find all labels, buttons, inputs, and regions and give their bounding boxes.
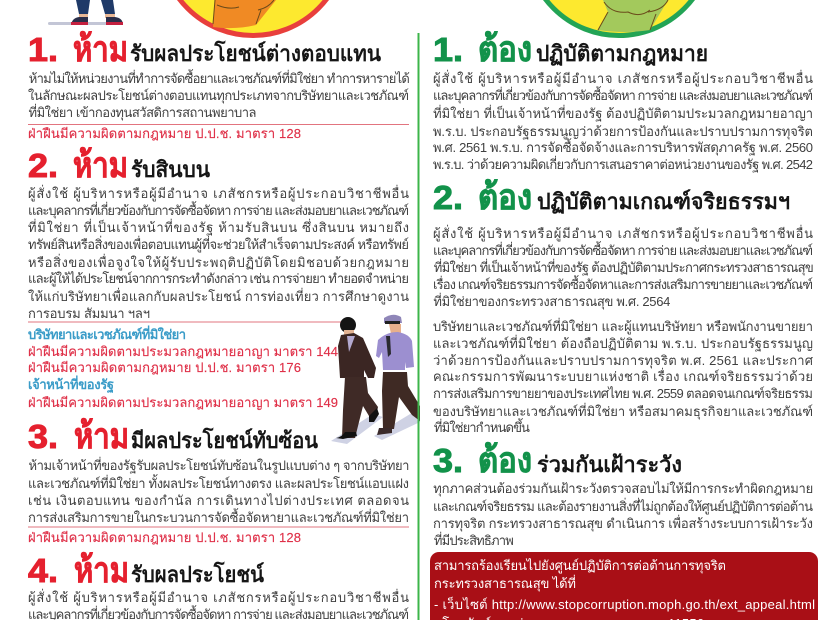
icon: red circle fist	[160, 0, 346, 36]
heading: obligation 1: ต้อง	[478, 30, 532, 69]
heading: prohibition 2: 2.	[28, 147, 58, 184]
text: prohibition 3 body: เช่น เงินตอบแทน ของกำนัล การเดินทางไปต่างประเทศ ตลอดจน	[28, 493, 409, 508]
text: prohibition 1 body	[28, 69, 410, 121]
text: prohibition 3 body: และเวชภัณฑ์ที่มิใช่ยา ทั้งผลประโยชน์ทางตรง และผลประโยชน์แอบแฝง	[28, 474, 409, 491]
heading: obligation 3	[433, 441, 682, 480]
divider	[418, 33, 420, 620]
text: prohibition 3 body: ห้ามเจ้าหน้าที่ของรัฐรับผลประโยชน์ทับซ้อนในรูปแบบต่าง ๆ จากบริษัทยา	[28, 457, 409, 474]
text: prohibition 1 body: ห้ามไม่ให้หน่วยงานที่ทำการจัดซื้อยาและเวชภัณฑ์ที่มิใช่ยา ทำการหารายได้	[29, 69, 410, 86]
text: obligation 2 second paragraph: คณะกรรมการพัฒนาระบบยาแห่งชาติ เรื่อง เกณฑ์จริยธรรมว่าด้วย	[433, 368, 813, 384]
text: prohibition 2 body: หรือสิ่งของเพื่อจูงใจให้ผู้รับประพฤติปฏิบัติโดยมิชอบด้วยกฎหมาย	[28, 254, 409, 271]
heading: prohibition 4	[28, 551, 264, 590]
text: prohibition 1 body: ในลักษณะผลประโยชน์ต่างตอบแทนทุกประเภทจากบริษัทยาและเวชภัณฑ์	[28, 88, 409, 104]
text: obligation 3 body: ทุกภาคส่วนต้องร่วมกันเฝ้าระวังตรวจสอบไม่ให้มีการกระทำผิดกฎหมาย	[433, 481, 813, 497]
text: prohibition 2 body: การอบรม สัมมนา ฯลฯ	[28, 306, 150, 321]
text: obligation 3 body: ที่มีประสิทธิภาพ	[434, 532, 514, 548]
text: prohibition 3 penalty: ฝ่าฝืนมีความผิดตามกฎหมาย ป.ป.ช. มาตรา 128	[28, 530, 301, 545]
text: obligation 2 second paragraph: ว่าด้วยการป้องกันและปราบปรามการทุจริต พ.ศ. 2561 และประกาศ	[433, 353, 814, 369]
suspect	[340, 317, 356, 333]
text: obligation 2 body: เรื่อง เกณฑ์จริยธรรมการจัดซื้อจัดหาและการส่งเสริมการขายยาและเวชภัณฑ์	[433, 275, 813, 292]
panel: obligations	[430, 30, 818, 620]
text: obligation 3 body: และเกณฑ์จริยธรรม และต้องรายงานสิ่งที่ไม่ถูกต้องให้ศูนย์ปฏิบัติการต่อต้าน	[433, 498, 813, 515]
text: prohibition 2 body: และผู้ให้ได้ประโยชน์จากการกระทำดังกล่าว เช่น การจ่ายยา ทำยอดจำหน่าย	[28, 271, 409, 287]
heading: prohibition 3: ห้าม	[74, 417, 129, 456]
text: prohibition 2 body	[28, 185, 409, 321]
heading: prohibition 1: ห้าม	[73, 30, 128, 69]
text: obligation 1 body: ผู้สั่งใช้ ผู้บริหารหรือผู้มีอำนาจ เภสัชกรหรือผู้ประกอบวิชาชีพอื่น	[433, 70, 813, 87]
icon: officer escorting suspect	[331, 315, 420, 444]
icon: green circle fist	[526, 0, 712, 36]
heading: prohibition 2: รับสินบน	[131, 157, 210, 182]
officer	[384, 315, 402, 323]
text: prohibition 2 body: ที่มิใช่ยา ที่เป็นเจ้าหน้าที่ของรัฐ ห้ามรับสินบน ซึ่งสินบน หมายถึง	[28, 218, 409, 236]
text: prohibition 2 body: และบุคลากรที่เกี่ยวข้องกับการจัดซื้อจัดหา การจ่าย และส่งมอบยาและเวชภัณฑ์	[28, 201, 409, 219]
heading: obligation 1: ปฏิบัติตามกฎหมาย	[536, 41, 708, 66]
text: prohibition 2 body: ทรัพย์สินหรือสิ่งของเพื่อตอบแทนผู้ที่จะช่วยให้สำเร็จตามประสงค์ หรือทรัพย์	[28, 235, 409, 253]
heading: prohibition 2: ห้าม	[73, 146, 128, 185]
text: obligation 3 body	[433, 481, 813, 548]
callout: complaint channels: - เว็บไซต์ http://www.stopcorruption.moph.go.th/ext_appeal.html	[434, 595, 815, 612]
text: prohibition 2 penalties: บริษัทยาและเวชภัณฑ์ที่มิใช่ยา	[28, 325, 186, 342]
heading: prohibition 3: 3.	[28, 418, 58, 455]
heading: prohibition 1: 1.	[28, 31, 58, 68]
text: prohibition 2 penalties: ฝ่าฝืนมีความผิดตามกฎหมาย ป.ป.ช. มาตรา 176	[28, 360, 301, 375]
heading: obligation 1: 1.	[433, 31, 463, 68]
heading: obligation 3: ร่วมกันเฝ้าระวัง	[537, 452, 682, 477]
heading: prohibition 3	[28, 417, 318, 456]
text: prohibition 2 penalties: เจ้าหน้าที่ของรัฐ	[28, 375, 114, 394]
heading: obligation 1	[433, 30, 708, 69]
text: obligation 2 second paragraph: และเวชภัณฑ์ที่มิใช่ยา ต้องถือปฏิบัติตาม พ.ร.บ. ประกอบรัฐธรรมนูญ	[433, 335, 813, 352]
text: prohibition 1 penalty: ฝ่าฝืนมีความผิดตามกฎหมาย ป.ป.ช. มาตรา 128	[28, 126, 301, 141]
text: prohibition 3 body	[28, 457, 409, 525]
heading: obligation 2: ต้อง	[478, 178, 532, 217]
text: prohibition 2 penalties: ฝ่าฝืนมีความผิดตามประมวลกฎหมายอาญา มาตรา 144	[28, 344, 338, 359]
text: obligation 2 body: ผู้สั่งใช้ ผู้บริหารหรือผู้มีอำนาจ เภสัชกรหรือผู้ประกอบวิชาชีพอื่น	[433, 225, 813, 242]
text: obligation 1 body: ที่มิใช่ยา ที่เป็นเจ้าหน้าที่ของรัฐ ต้องปฏิบัติตามประมวลกฎหมายอาญา	[433, 104, 813, 122]
heading: prohibition 1	[28, 30, 381, 69]
heading: prohibition 1: รับผลประโยชน์ต่างตอบแทน	[130, 40, 381, 66]
callout: complaint channels: สามารถร้องเรียนไปยังศูนย์ปฏิบัติการต่อต้านการทุจริต	[434, 558, 726, 574]
heading: prohibition 2	[28, 146, 210, 185]
text: obligation 1 body: พ.ร.บ. ประกอบรัฐธรรมนูญว่าด้วยการป้องกันและปราบปรามการทุจริต	[433, 124, 813, 140]
icon: person legs	[48, 0, 123, 25]
text: prohibition 2 penalties	[28, 325, 338, 410]
text: prohibition 2 body: ให้แก่บริษัทยาเพื่อแลกกับผลประโยชน์ การท่องเที่ยว การศึกษาดูงาน	[28, 288, 409, 305]
callout: complaint channels	[430, 552, 818, 620]
text: obligation 2 body: ที่มิใช่ยาของกระทรวงสาธารณสุข พ.ศ. 2564	[433, 293, 670, 310]
text: obligation 2 second paragraph: บริษัทยาและเวชภัณฑ์ที่มิใช่ยา และผู้แทนบริษัทยา หรือพนักงานขายยา	[433, 318, 813, 335]
text: obligation 3 body: การทุจริต กระทรวงสาธารณสุข ดำเนินการ เพื่อสร้างระบบการเฝ้าระวัง	[433, 515, 813, 532]
text: obligation 2 body: ที่มิใช่ยา ที่เป็นเจ้าหน้าที่ของรัฐ ต้องปฏิบัติตามประกาศกระทรวงสาธารณสุข	[434, 258, 814, 276]
heading: prohibition 4: ห้าม	[74, 551, 129, 590]
text: obligation 2 second paragraph: ที่มิใช่ยากำหนดขึ้น	[434, 418, 530, 435]
text: prohibition 3 body: การส่งเสริมการขายในกระบวนการจัดซื้อจัดหายาและเวชภัณฑ์ที่มิใช่ยา	[28, 508, 409, 525]
text: prohibition 2 body: ผู้สั่งใช้ ผู้บริหารหรือผู้มีอำนาจ เภสัชกรหรือผู้ประกอบวิชาชีพอื่น	[28, 185, 409, 202]
text: obligation 2 second paragraph: การส่งเสริมการขายยาของประเทศไทย พ.ศ. 2559 ตลอดจนเกณฑ์จริยธรรม	[433, 386, 813, 401]
text: prohibition 4 body	[28, 589, 409, 620]
text: obligation 1 body: และบุคลากรที่เกี่ยวข้องกับการจัดซื้อจัดหา การจ่าย และส่งมอบยาและเวชภัณฑ์	[433, 86, 813, 104]
text: obligation 2 second paragraph	[433, 318, 814, 435]
text: obligation 1 body: พ.ศ. 2561 พ.ร.บ. การจัดซื้อจัดจ้างและการบริหารพัสดุภาครัฐ พ.ศ. 2560	[433, 138, 813, 156]
heading: prohibition 4: รับผลประโยชน์	[131, 561, 264, 587]
text: prohibition 2 penalties: ฝ่าฝืนมีความผิดตามประมวลกฎหมายอาญา มาตรา 149	[28, 395, 338, 410]
shadows	[331, 408, 420, 444]
text: prohibition 4 body: ผู้สั่งใช้ ผู้บริหารหรือผู้มีอำนาจ เภสัชกรหรือผู้ประกอบวิชาชีพอื่น	[28, 589, 409, 606]
callout: complaint channels: กระทรวงสาธารณสุข ได้ที่	[434, 575, 576, 592]
heading: obligation 2: ปฏิบัติตามเกณฑ์จริยธรรมฯ	[537, 189, 790, 214]
text: obligation 2 body	[433, 225, 814, 310]
text: obligation 2 second paragraph: ของบริษัทยาและเวชภัณฑ์ที่มิใช่ยา หรือสมาคมธุรกิจยาและเวชภัณฑ์	[433, 403, 813, 420]
text: prohibition 1 body: ที่มิใช่ยา เข้ากองทุนสวัสดิการสถานพยาบาล	[29, 104, 257, 121]
heading: obligation 3: 3.	[433, 442, 463, 479]
panel: prohibitions	[28, 30, 420, 620]
heading: obligation 3: ต้อง	[478, 441, 532, 480]
text: obligation 1 body: พ.ร.บ. ว่าด้วยความผิดเกี่ยวกับการเสนอราคาต่อหน่วยงานของรัฐ พ.ศ. 2542	[433, 156, 813, 173]
heading: obligation 2: 2.	[433, 179, 463, 216]
heading: prohibition 4: 4.	[28, 552, 58, 589]
text: obligation 1 body	[433, 70, 813, 173]
text: obligation 2 body: และบุคลากรที่เกี่ยวข้องกับการจัดซื้อจัดหา การจ่าย และส่งมอบยาและเวชภัณฑ์	[433, 241, 813, 259]
heading: obligation 2	[433, 178, 790, 217]
heading: prohibition 3: มีผลประโยชน์ทับซ้อน	[131, 427, 318, 453]
